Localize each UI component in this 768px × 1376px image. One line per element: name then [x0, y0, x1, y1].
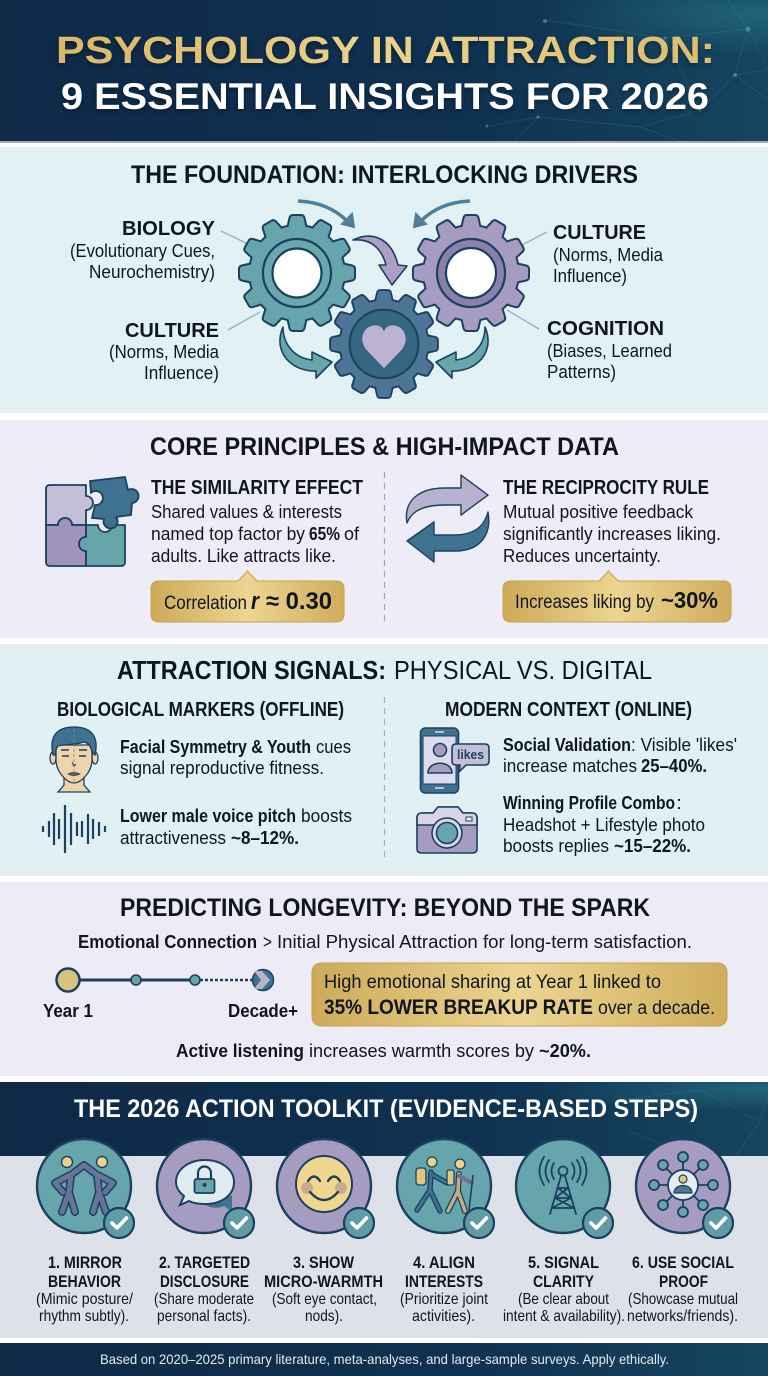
arrow: bottom right: [436, 327, 488, 378]
divider: [384, 472, 386, 622]
icon: reciprocity arrows: [406, 475, 489, 562]
block: similarity effect: Shared values & interests: [151, 502, 342, 522]
label: culture right: (Norms, Media: [553, 245, 664, 265]
block: reciprocity rule: [503, 477, 721, 566]
icon: hikers: [397, 1139, 494, 1238]
callout: correlation: [151, 571, 344, 622]
label: step 4: activities).: [412, 1308, 475, 1325]
icon: face: [50, 727, 98, 792]
block: reciprocity rule: significantly increases liking.: [503, 524, 721, 544]
text: voice pitch: ~8–12%.: [231, 828, 299, 848]
callout: breakup rate: over a decade.: [598, 998, 715, 1019]
callout: correlation: r: [251, 588, 260, 615]
text: winning profile combo: Headshot + Lifestyle photo: [503, 815, 705, 835]
label: step 2: 2. TARGETED: [159, 1253, 250, 1272]
panel: action toolkit: [0, 1082, 768, 1338]
icon: voice waveform: [43, 805, 105, 853]
title: [56, 30, 715, 117]
panel: core principles: [0, 420, 768, 638]
icon: lock speech bubble: [157, 1139, 254, 1238]
step 5: signal clarity: [503, 1139, 625, 1325]
subheading: emotional connection: [78, 932, 692, 952]
label: step 5: [503, 1253, 625, 1325]
icon: camera: [417, 807, 477, 853]
text: facial symmetry: cues: [316, 737, 351, 757]
label: step 6: (Showcase mutual: [628, 1291, 738, 1308]
icon: phone with likes: [420, 728, 489, 793]
subheading: emotional connection: Initial Physical Attraction for long-term satisfaction.: [277, 932, 692, 952]
arrow: purple centre: [353, 236, 407, 285]
label: step 4: [400, 1253, 488, 1325]
heading: longevity: PREDICTING LONGEVITY: BEYOND THE SPARK: [120, 894, 650, 922]
text: voice pitch: boosts: [301, 806, 352, 826]
text: winning profile combo: [503, 793, 705, 856]
label: step 4: 4. ALIGN: [413, 1253, 475, 1272]
gear: centre heart: [331, 291, 437, 397]
icon: signal tower: [516, 1139, 613, 1238]
label: biology: Neurochemistry): [89, 262, 215, 282]
label: step 4: INTERESTS: [405, 1272, 483, 1291]
panel: predicting longevity: [0, 882, 768, 1076]
subheading: emotional connection: >: [263, 932, 272, 952]
timeline: [43, 968, 298, 1021]
gear: culture purple: [414, 216, 528, 330]
label: culture left: CULTURE: [125, 320, 219, 342]
header banner: [0, 0, 768, 143]
label: step 6: PROOF: [659, 1272, 708, 1291]
icon: phone with likes: likes: [457, 748, 484, 762]
label: cognition: Patterns): [547, 362, 616, 382]
text: social validation: increase matches: [503, 756, 637, 776]
timeline: Year 1: [43, 1001, 93, 1021]
text: social validation: Social Validation: [503, 735, 631, 755]
label: step 3: MICRO-WARMTH: [264, 1272, 383, 1291]
heading: attraction signals: [117, 655, 652, 685]
label: step 6: [627, 1253, 738, 1325]
label: culture left: [109, 320, 220, 383]
block: reciprocity rule: Mutual positive feedback: [503, 502, 694, 522]
heading: attraction signals: PHYSICAL VS. DIGITAL: [394, 655, 652, 685]
text: winning profile combo: boosts replies: [503, 836, 609, 856]
step 4: align interests: [397, 1139, 494, 1325]
label: step 6: 6. USE SOCIAL: [632, 1253, 734, 1272]
icon: network: [636, 1139, 733, 1238]
subheading: emotional connection: Emotional Connection: [78, 932, 257, 952]
label: step 3: (Soft eye contact,: [272, 1291, 377, 1308]
callout: breakup rate: 35% LOWER BREAKUP RATE: [324, 996, 593, 1019]
footer: Based on 2020–2025 primary literature, meta-analyses, and large-sample surveys. Apply ethically.: [100, 1351, 669, 1367]
title: PSYCHOLOGY IN ATTRACTION:: [56, 30, 715, 72]
label: step 2: DISCLOSURE: [160, 1272, 249, 1291]
block: similarity effect: 65%: [309, 524, 340, 544]
step 1: mirror behavior: [36, 1139, 134, 1325]
label: culture left: Influence): [144, 363, 219, 383]
block: reciprocity rule: Reduces uncertainty.: [503, 546, 661, 566]
panel: foundation: [0, 147, 768, 413]
label: biology: [70, 218, 216, 282]
text: voice pitch: Lower male voice pitch: [120, 806, 296, 826]
text: active listening: ~20%.: [539, 1041, 591, 1061]
label: step 5: CLARITY: [533, 1272, 595, 1291]
callout: breakup rate: High emotional sharing at Year 1 linked to: [324, 972, 661, 993]
label: step 6: networks/friends).: [627, 1308, 738, 1325]
callout: liking increase: ~30%: [661, 587, 718, 613]
step 2: targeted disclosure: [154, 1139, 254, 1325]
gear: biology teal: [240, 216, 354, 330]
callout: liking increase: [503, 571, 731, 622]
label: cognition: [547, 318, 672, 382]
label: step 1: rhythm subtly).: [39, 1308, 129, 1325]
text: winning profile combo: Winning Profile Combo: [503, 793, 675, 813]
label: cognition: COGNITION: [547, 318, 664, 340]
block: similarity effect: [151, 477, 363, 566]
leader lines: [221, 231, 547, 330]
text: social validation: 25–40%.: [641, 756, 707, 776]
text: facial symmetry: [120, 737, 351, 778]
text: facial symmetry: Facial Symmetry & Youth: [120, 737, 311, 757]
heading: core principles: CORE PRINCIPLES & HIGH-IMPACT DATA: [150, 433, 619, 461]
label: step 5: 5. SIGNAL: [528, 1253, 599, 1272]
icon: mirroring figures: [37, 1139, 134, 1238]
label: biology: (Evolutionary Cues,: [70, 241, 215, 261]
label: culture right: CULTURE: [553, 222, 646, 244]
label: step 1: BEHAVIOR: [48, 1272, 121, 1291]
title: 9 ESSENTIAL INSIGHTS FOR 2026: [61, 76, 709, 117]
text: voice pitch: [120, 806, 352, 848]
text: winning profile combo: :: [676, 793, 682, 813]
label: step 5: intent & availability).: [503, 1308, 625, 1325]
label: step 2: (Share moderate: [154, 1291, 254, 1308]
label: step 2: [154, 1253, 254, 1325]
label: culture left: (Norms, Media: [109, 342, 220, 362]
callout: breakup rate: [312, 963, 727, 1026]
text: facial symmetry: signal reproductive fitness.: [120, 758, 324, 778]
subheading: offline: BIOLOGICAL MARKERS (OFFLINE): [57, 699, 344, 721]
label: biology: BIOLOGY: [122, 218, 216, 240]
text: voice pitch: attractiveness: [120, 828, 226, 848]
label: step 1: [36, 1253, 133, 1325]
heading: toolkit: THE 2026 ACTION TOOLKIT (EVIDENCE-BASED STEPS): [74, 1095, 698, 1123]
text: active listening: increases warmth scores by: [309, 1041, 534, 1061]
callout: liking increase: Increases liking by: [515, 592, 654, 613]
timeline: Decade+: [228, 1001, 298, 1021]
label: cognition: (Biases, Learned: [547, 341, 672, 361]
text: social validation: [503, 735, 737, 776]
heading: foundation: THE FOUNDATION: INTERLOCKING DRIVERS: [131, 161, 638, 189]
text: active listening: Active listening: [176, 1041, 304, 1061]
block: similarity effect: adults. Like attracts like.: [151, 546, 336, 566]
callout: correlation: ≈ 0.30: [266, 588, 332, 615]
block: similarity effect: named top factor by: [151, 524, 305, 544]
arrow: bottom left: [280, 327, 332, 378]
label: culture right: [553, 222, 664, 286]
step 3: micro-warmth: [264, 1139, 383, 1325]
heading: attraction signals: ATTRACTION SIGNALS:: [117, 655, 386, 685]
label: step 3: 3. SHOW: [293, 1253, 355, 1272]
label: culture right: Influence): [553, 266, 627, 286]
text: winning profile combo: ~15–22%.: [614, 836, 691, 856]
block: similarity effect: of: [344, 524, 360, 544]
callout: correlation: Correlation: [164, 593, 247, 614]
label: step 1: (Mimic posture/: [36, 1291, 133, 1308]
block: reciprocity rule: THE RECIPROCITY RULE: [503, 477, 709, 499]
subheading: online: MODERN CONTEXT (ONLINE): [445, 699, 692, 721]
text: social validation: : Visible 'likes': [631, 735, 737, 755]
label: step 3: [264, 1253, 383, 1325]
block: similarity effect: THE SIMILARITY EFFECT: [151, 477, 363, 499]
label: step 1: 1. MIRROR: [48, 1253, 122, 1272]
arrow: top left: [298, 201, 354, 227]
panel: attraction signals: [0, 644, 768, 876]
arrow: top right: [414, 201, 470, 227]
divider: [384, 697, 386, 860]
label: step 5: (Be clear about: [518, 1291, 609, 1308]
label: step 3: nods).: [305, 1308, 343, 1325]
footer: [0, 1343, 768, 1376]
icon: puzzle: [46, 477, 139, 566]
step 6: social proof: [627, 1139, 738, 1325]
text: active listening: [176, 1041, 591, 1061]
label: step 4: (Prioritize joint: [400, 1291, 488, 1308]
label: step 2: personal facts).: [157, 1308, 251, 1325]
icon: smiling face: [277, 1139, 374, 1238]
